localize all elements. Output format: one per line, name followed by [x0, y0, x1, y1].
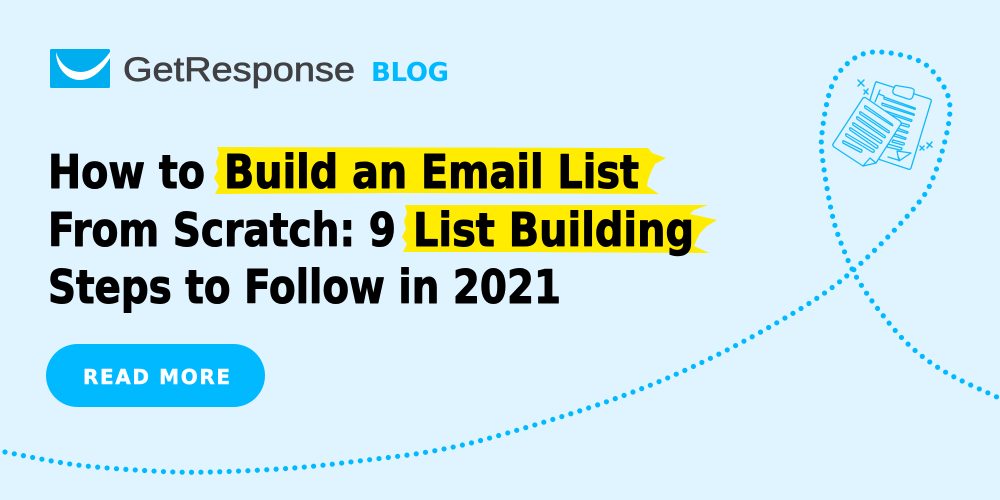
paper sheet [833, 98, 901, 166]
highlighted phrase one: Build an Email List [224, 145, 639, 199]
logo wordmark: GetResponse [123, 51, 355, 89]
blog label: BLOG [371, 58, 449, 88]
button: read more [46, 344, 265, 407]
title [48, 145, 717, 314]
title line three: Steps to Follow in 2021 [48, 260, 561, 314]
sparkle marks [858, 80, 932, 150]
button: read more: READ MORE [83, 365, 230, 389]
clipboard [870, 82, 931, 169]
highlight: line two [402, 205, 717, 253]
title line two: From Scratch: 9 [48, 203, 396, 257]
title line one: How to [48, 145, 205, 199]
icon: envelope smile [50, 49, 110, 88]
icon: clipboard and paper [833, 80, 932, 169]
highlight: line one [214, 147, 666, 194]
logo [50, 49, 449, 89]
highlighted phrase two: List Building [413, 203, 694, 257]
